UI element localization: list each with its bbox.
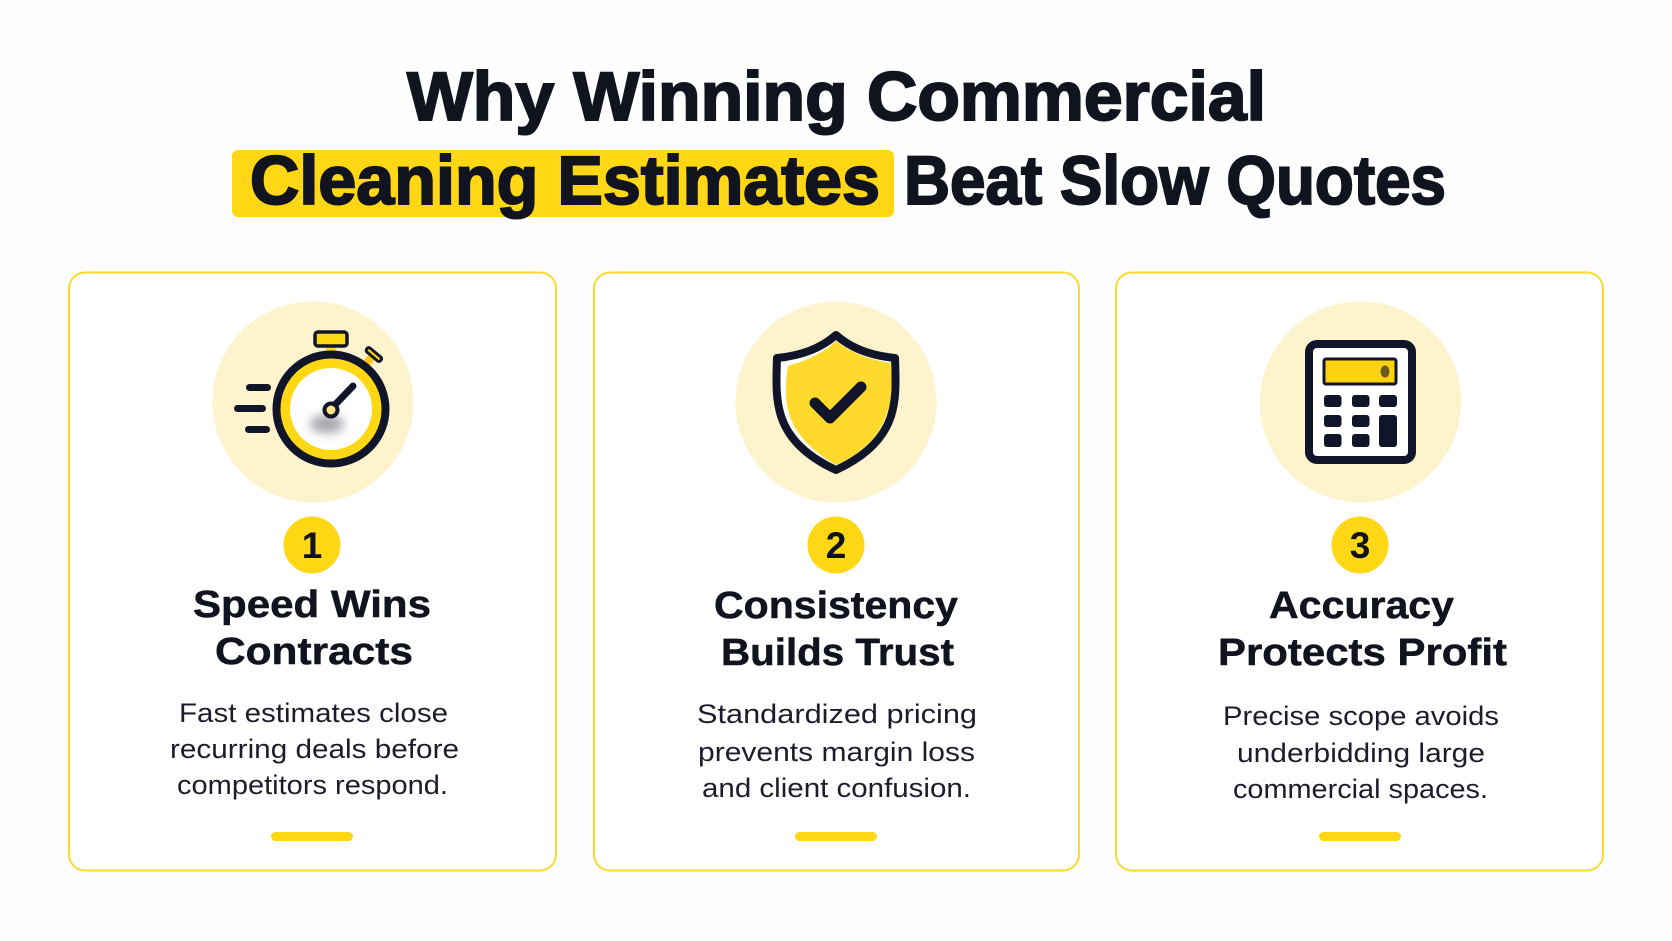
- accent bar: [795, 832, 877, 841]
- icon: stopwatch: [212, 302, 414, 502]
- heading: accuracy protects profit: Protects Profit: [1218, 632, 1507, 674]
- text: accuracy description: Precise scope avoids: [1223, 701, 1499, 731]
- text: accuracy description: commercial spaces.: [1233, 774, 1488, 804]
- step number 2: [808, 516, 864, 574]
- panel: speed: [69, 272, 556, 870]
- heading: accuracy protects profit: Accuracy: [1269, 585, 1454, 627]
- heading: accuracy protects profit: [1218, 585, 1507, 674]
- icon: calculator: [1260, 302, 1461, 502]
- text: accuracy description: underbidding large: [1237, 738, 1485, 768]
- step number 3: [1332, 516, 1388, 574]
- accent bar: [1319, 832, 1401, 841]
- accent bar: [271, 832, 353, 841]
- title: Why Winning Commercial: [407, 58, 1266, 135]
- text: accuracy description: [1223, 701, 1499, 804]
- text: consistency description: and client confusion.: [702, 773, 971, 803]
- step number 1: 1: [302, 525, 322, 566]
- heading: consistency builds trust: Builds Trust: [721, 632, 954, 674]
- step number 2: 2: [826, 525, 846, 566]
- heading: consistency builds trust: Consistency: [714, 585, 958, 627]
- text: speed description: Fast estimates close: [179, 698, 448, 728]
- text: speed description: [170, 698, 459, 800]
- step number 3: 3: [1350, 525, 1370, 566]
- text: speed description: competitors respond.: [177, 770, 448, 800]
- icon: shield with check: [736, 302, 936, 502]
- heading: speed wins contracts: [193, 584, 431, 673]
- title: Beat Slow Quotes: [904, 142, 1446, 219]
- title highlight: Cleaning Estimates: [250, 142, 880, 219]
- heading: speed wins contracts: Contracts: [215, 631, 413, 673]
- panel: accuracy: [1116, 272, 1603, 870]
- text: consistency description: [697, 699, 977, 803]
- text: speed description: recurring deals before: [170, 734, 459, 764]
- title: [232, 58, 1446, 219]
- heading: consistency builds trust: [714, 585, 958, 674]
- step number 1: [284, 516, 340, 574]
- text: consistency description: Standardized pricing: [697, 699, 977, 729]
- panel: consistency: [594, 272, 1079, 870]
- heading: speed wins contracts: Speed Wins: [193, 584, 431, 626]
- text: consistency description: prevents margin loss: [698, 737, 975, 767]
